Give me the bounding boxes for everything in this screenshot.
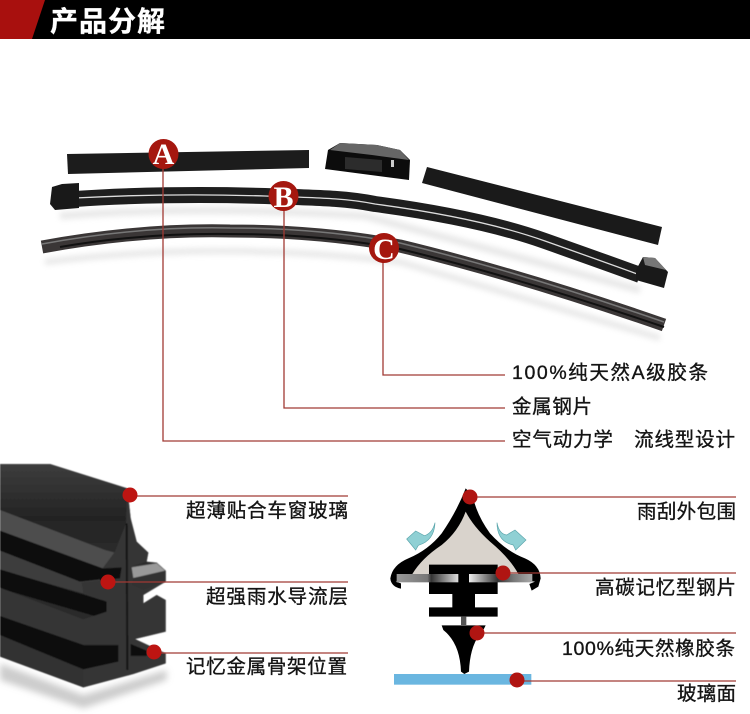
groove 3 <box>0 616 118 669</box>
title: 产品分解 <box>50 6 165 37</box>
groove 1 <box>0 531 122 583</box>
stem <box>429 565 498 617</box>
part: rubber refill C <box>42 228 664 327</box>
leader line A <box>163 168 505 441</box>
upper rib highlight <box>0 510 115 568</box>
left arrow <box>407 523 435 550</box>
drop shadow <box>0 663 167 708</box>
groove 2 <box>0 569 107 617</box>
badge A: A <box>153 138 175 171</box>
soft shadows under wiper parts <box>45 210 660 338</box>
right arrow <box>497 523 526 550</box>
red dots right panel <box>462 490 524 688</box>
left end cap <box>50 183 79 210</box>
badge B <box>268 181 298 214</box>
header red accent <box>0 0 45 39</box>
panel: rubber cross-section photo <box>0 464 167 708</box>
label C: 100%纯天然A级胶条 <box>512 362 708 384</box>
label: glass: 玻璃面 <box>677 683 736 705</box>
red dots left panel <box>100 488 162 660</box>
front face <box>82 488 166 687</box>
grey fill <box>412 512 518 574</box>
label: carbon steel: 高碳记忆型钢片 <box>595 577 736 599</box>
marker lines right panel <box>475 497 736 681</box>
black shell <box>390 488 541 591</box>
label: outer wrap: 雨刮外包围 <box>637 501 736 523</box>
right end cap <box>636 257 668 288</box>
lower notch <box>131 644 147 656</box>
backing silhouette <box>0 464 166 687</box>
rib 2 <box>0 551 102 600</box>
label B: 金属钢片 <box>512 396 592 418</box>
marker lines left panel <box>115 496 348 653</box>
steel strips <box>397 574 458 582</box>
leader line B <box>284 208 505 408</box>
centre seam <box>124 523 130 670</box>
diagram: wiper section <box>390 488 541 685</box>
top tab highlight <box>132 563 165 578</box>
part: wiper rubber strip left <box>67 150 309 174</box>
rib 4 <box>0 635 83 687</box>
badge C: C <box>373 233 395 266</box>
label: water channel: 超强雨水导流层 <box>206 586 348 608</box>
part: center connector <box>325 143 410 180</box>
rib 3 <box>0 588 83 647</box>
label A: 空气动力学 流线型设计 <box>512 429 735 451</box>
badge B: B <box>273 181 294 214</box>
fin surface <box>0 464 127 562</box>
glass <box>394 674 531 685</box>
part: wiper rubber strip right <box>422 167 662 245</box>
label: natural rubber: 100%纯天然橡胶条 <box>562 638 735 660</box>
lip <box>442 625 486 674</box>
header bar <box>0 0 750 39</box>
part: metal blade B <box>50 183 668 288</box>
label: ultra thin: 超薄贴合车窗玻璃 <box>186 500 348 522</box>
label: memory metal: 记忆金属骨架位置 <box>186 656 347 678</box>
leader line C <box>383 262 505 375</box>
